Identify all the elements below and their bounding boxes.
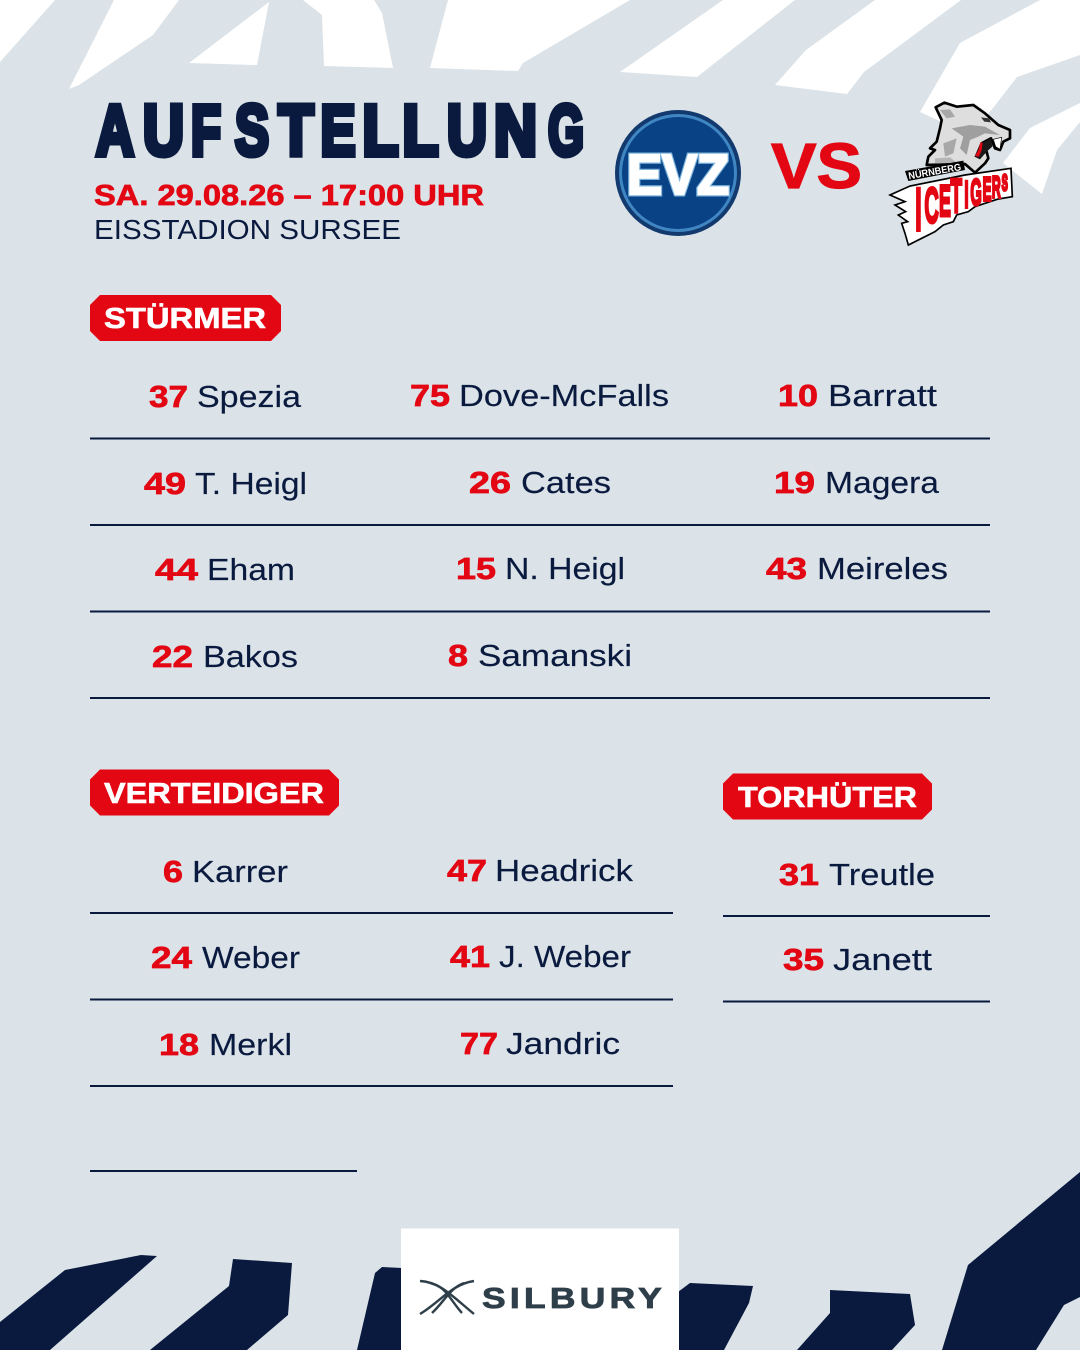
player 10 Barratt <box>778 378 937 413</box>
title: F <box>191 92 221 171</box>
player 31 Treutle <box>779 857 935 892</box>
venue: EISSTADION SURSEE <box>94 214 401 245</box>
title <box>96 92 584 171</box>
IceTigers wordmark: C <box>924 179 939 234</box>
player 15 N. Heigl: N. Heigl <box>505 551 625 586</box>
top white stripe pattern <box>0 0 1080 194</box>
player 43 Meireles <box>766 551 948 586</box>
logo: Nürnberg Ice Tigers <box>890 103 1012 245</box>
logo: EVZ: EVZ <box>627 143 729 207</box>
player 18 Merkl: 18 <box>159 1027 199 1062</box>
title: U <box>447 92 487 171</box>
player 6 Karrer: Karrer <box>192 854 288 889</box>
logo: EVZ: EVZ <box>627 143 729 207</box>
player 77 Jandric: Jandric <box>506 1026 620 1061</box>
heading: Stürmer: STÜRMER <box>104 302 266 335</box>
player 10 Barratt: Barratt <box>828 378 937 413</box>
player 44 Eham <box>155 552 295 587</box>
player 43 Meireles: Meireles <box>817 551 948 586</box>
player 35 Janett <box>783 942 932 977</box>
icon: Silbury crossed swoosh <box>420 1281 474 1314</box>
player 77 Jandric <box>460 1026 620 1061</box>
player 31 Treutle: 31 <box>779 857 819 892</box>
IceTigers wordmark: E <box>983 172 991 209</box>
IceTigers wordmark: I <box>964 175 969 217</box>
player 77 Jandric: 77 <box>460 1026 498 1061</box>
player 22 Bakos: Bakos <box>203 639 298 674</box>
player 44 Eham: 44 <box>155 552 199 587</box>
player 26 Cates: 26 <box>469 465 511 500</box>
player 15 N. Heigl <box>456 551 625 586</box>
player 37 Spezia: Spezia <box>197 379 302 414</box>
title: T <box>278 92 314 171</box>
panel: Stürmer roster <box>90 378 990 698</box>
player 47 Headrick: Headrick <box>495 853 634 888</box>
title: E <box>320 92 356 171</box>
tiger head <box>927 103 1010 173</box>
player 35 Janett: 35 <box>783 942 824 977</box>
title: A <box>96 92 134 171</box>
title: N <box>494 92 537 171</box>
title: S <box>235 92 269 171</box>
player 10 Barratt: 10 <box>778 378 818 413</box>
IceTigers wordmark <box>915 169 1008 244</box>
player 44 Eham: Eham <box>207 552 295 587</box>
date and time: SA. 29.08.26 – 17:00 UHR <box>94 180 484 212</box>
heading: Torhüter <box>723 774 932 820</box>
heading: Torhüter: TORHÜTER <box>738 781 917 814</box>
Nürnberg band: NÜRNBERG <box>907 160 962 182</box>
player 49 T. Heigl: T. Heigl <box>195 466 307 501</box>
panel: Torhüter roster <box>723 857 990 1002</box>
wordmark: Silbury: SILBURY <box>482 1283 666 1315</box>
player 6 Karrer: 6 <box>163 854 183 889</box>
IceTigers wordmark: E <box>939 177 951 227</box>
IceTigers wordmark: S <box>1002 170 1008 196</box>
title: G <box>548 92 584 171</box>
versus label: VS <box>771 130 862 202</box>
IceTigers wordmark: T <box>950 169 962 223</box>
panel: Verteidiger roster <box>90 853 673 1086</box>
player 31 Treutle: Treutle <box>829 857 935 892</box>
player 24 Weber: Weber <box>202 940 300 975</box>
player 47 Headrick: 47 <box>447 853 487 888</box>
title: U <box>143 92 184 171</box>
player 75 Dove-McFalls: Dove-McFalls <box>459 378 669 413</box>
player 8 Samanski: Samanski <box>478 638 632 673</box>
player 47 Headrick <box>447 853 634 888</box>
player 22 Bakos: 22 <box>152 639 193 674</box>
title: L <box>362 92 398 171</box>
title: L <box>402 92 438 171</box>
player 19 Magera: Magera <box>825 465 940 500</box>
player 41 J. Weber: 41 <box>450 939 490 974</box>
player 18 Merkl: Merkl <box>209 1027 292 1062</box>
IceTigers wordmark: R <box>992 170 1001 204</box>
sponsor panel: Silbury <box>401 1228 679 1350</box>
logo: EVZ <box>615 110 741 236</box>
heading: Verteidiger: VERTEIDIGER <box>104 778 324 810</box>
player 6 Karrer <box>163 854 288 889</box>
player 15 N. Heigl: 15 <box>456 551 496 586</box>
player 35 Janett: Janett <box>833 942 932 977</box>
player 75 Dove-McFalls: 75 <box>410 378 450 413</box>
player 22 Bakos <box>152 639 298 674</box>
player 49 T. Heigl <box>144 466 307 501</box>
player 26 Cates <box>469 465 611 500</box>
player 43 Meireles: 43 <box>766 551 807 586</box>
player 8 Samanski: 8 <box>448 638 468 673</box>
player 24 Weber <box>151 940 300 975</box>
player 41 J. Weber <box>450 939 631 974</box>
player 37 Spezia <box>149 379 302 414</box>
heading: Stürmer <box>90 295 281 341</box>
player 19 Magera: 19 <box>774 465 815 500</box>
banner <box>890 168 1012 245</box>
player 24 Weber: 24 <box>151 940 193 975</box>
IceTigers wordmark: I <box>915 176 922 244</box>
player 19 Magera <box>774 465 940 500</box>
player 18 Merkl <box>159 1027 292 1062</box>
player 49 T. Heigl: 49 <box>144 466 186 501</box>
player 26 Cates: Cates <box>521 465 611 500</box>
bottom navy stripe pattern <box>0 1172 1080 1350</box>
heading: Verteidiger <box>90 770 339 816</box>
player 41 J. Weber: J. Weber <box>499 939 631 974</box>
IceTigers wordmark: G <box>970 172 982 213</box>
player 37 Spezia: 37 <box>149 379 188 414</box>
